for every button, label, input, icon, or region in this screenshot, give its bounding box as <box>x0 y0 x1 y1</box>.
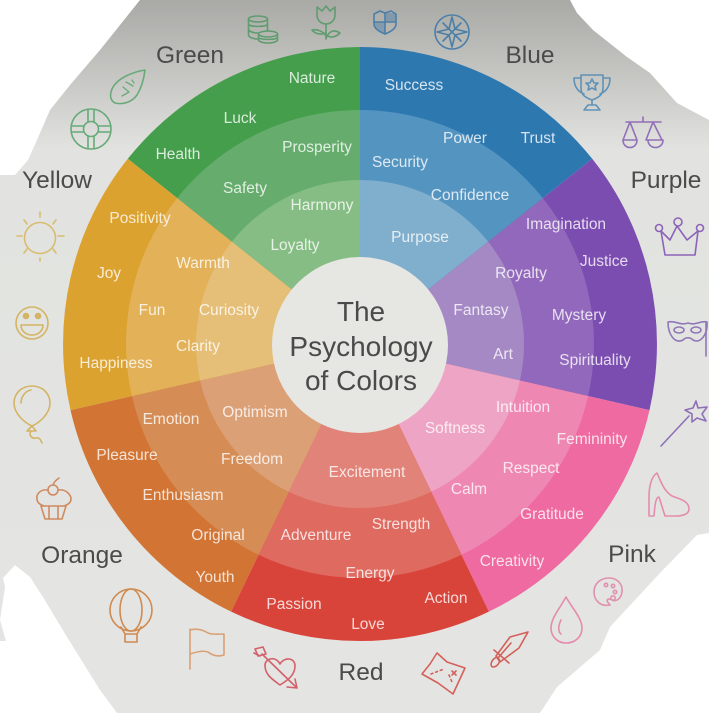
panel: purple <box>360 159 657 410</box>
panel: orange: Optimism <box>222 404 288 421</box>
icon: compass <box>435 15 469 49</box>
panel: orange <box>70 344 360 612</box>
panel: pink: Creativity <box>480 553 545 570</box>
icon: shield <box>374 11 396 34</box>
icon: palette <box>594 578 622 605</box>
panel: yellow: Clarity <box>176 338 220 355</box>
panel: purple: Royalty <box>495 265 547 282</box>
panel: orange: Emotion <box>143 411 199 428</box>
icon: mask <box>668 322 707 356</box>
icon: leaf <box>111 70 145 104</box>
panel: purple: Spirituality <box>559 352 631 369</box>
panel: green: Health <box>156 146 200 163</box>
panel: blue: Power <box>443 130 487 147</box>
icon: trophy <box>574 75 610 110</box>
panel: yellow: Joy <box>97 265 121 282</box>
center circle title <box>272 257 448 433</box>
icon: wand <box>661 401 707 446</box>
heading: Blue: Blue <box>505 42 555 69</box>
heading: Purple: Purple <box>631 167 701 194</box>
center circle title: The <box>337 296 385 327</box>
panel: blue: Security <box>372 154 428 171</box>
panel: green: Prosperity <box>282 139 352 156</box>
panel: pink: Intuition <box>496 399 550 416</box>
panel: pink: Gratitude <box>520 506 584 523</box>
icon: map <box>422 653 465 694</box>
panel: blue: Purpose <box>391 229 449 246</box>
panel: red: Adventure <box>281 527 351 544</box>
heading: Yellow: Yellow <box>22 167 92 194</box>
center circle title: of Colors <box>305 365 417 396</box>
panel: yellow: Warmth <box>176 255 230 272</box>
panel: orange: Original <box>191 527 245 544</box>
icon: cupcake <box>37 478 71 519</box>
icon: lifebuoy <box>71 109 111 149</box>
heading: Green: Green <box>156 42 224 69</box>
panel: red: Excitement <box>329 464 406 481</box>
panel: purple: Art <box>493 346 514 363</box>
panel: blue <box>360 47 592 344</box>
icon: balloon <box>14 386 50 443</box>
icon: flag <box>190 629 224 669</box>
panel: orange: Freedom <box>221 451 283 468</box>
panel: orange: Enthusiasm <box>143 487 223 504</box>
panel: yellow: Fun <box>139 302 165 319</box>
panel: green: Harmony <box>291 197 354 214</box>
panel: yellow: Positivity <box>109 210 171 227</box>
panel: red: Love <box>351 616 385 633</box>
panel: pink: Calm <box>451 481 487 498</box>
panel: pink <box>360 344 650 612</box>
panel: purple: Fantasy <box>453 302 509 319</box>
panel: green <box>128 47 360 344</box>
panel: purple: Mystery <box>552 307 606 324</box>
icon: drop <box>551 597 582 643</box>
panel: yellow: Curiosity <box>199 302 259 319</box>
panel: red: Passion <box>266 596 322 613</box>
icon: heart with arrow <box>254 647 297 688</box>
icon: crown <box>656 218 704 255</box>
icon: coins <box>248 16 278 43</box>
panel: orange: Pleasure <box>96 447 158 464</box>
panel: green: Safety <box>223 180 267 197</box>
panel: green: Nature <box>289 70 335 87</box>
panel: red: Action <box>424 590 468 607</box>
panel: pink: Respect <box>503 460 560 477</box>
panel: red: Strength <box>372 516 430 533</box>
icon: tulip <box>312 6 340 39</box>
panel: red <box>231 344 489 641</box>
panel: orange: Youth <box>195 569 235 586</box>
icon: sword <box>491 632 528 667</box>
icon: high heel shoe <box>649 473 689 516</box>
panel: blue: Success <box>385 77 444 94</box>
heading: Red: Red <box>339 659 383 686</box>
icon: scales <box>623 117 663 148</box>
panel: yellow: Happiness <box>79 355 153 372</box>
panel: pink: Softness <box>425 420 485 437</box>
panel: purple: Imagination <box>526 216 606 233</box>
panel: blue: Trust <box>521 130 556 147</box>
heading: Orange: Orange <box>41 542 123 569</box>
icon: hot air balloon <box>110 589 152 642</box>
panel: blue: Confidence <box>431 187 509 204</box>
panel: green: Luck <box>224 110 257 127</box>
panel: purple: Justice <box>580 253 628 270</box>
icon: sun <box>17 212 64 261</box>
panel: yellow <box>63 159 360 410</box>
panel: green: Loyalty <box>270 237 320 254</box>
center circle title: Psychology <box>289 331 433 362</box>
panel: pink: Femininity <box>557 431 628 448</box>
heading: Pink: Pink <box>608 541 657 568</box>
panel: red: Energy <box>345 565 395 582</box>
icon: smile <box>16 307 48 339</box>
